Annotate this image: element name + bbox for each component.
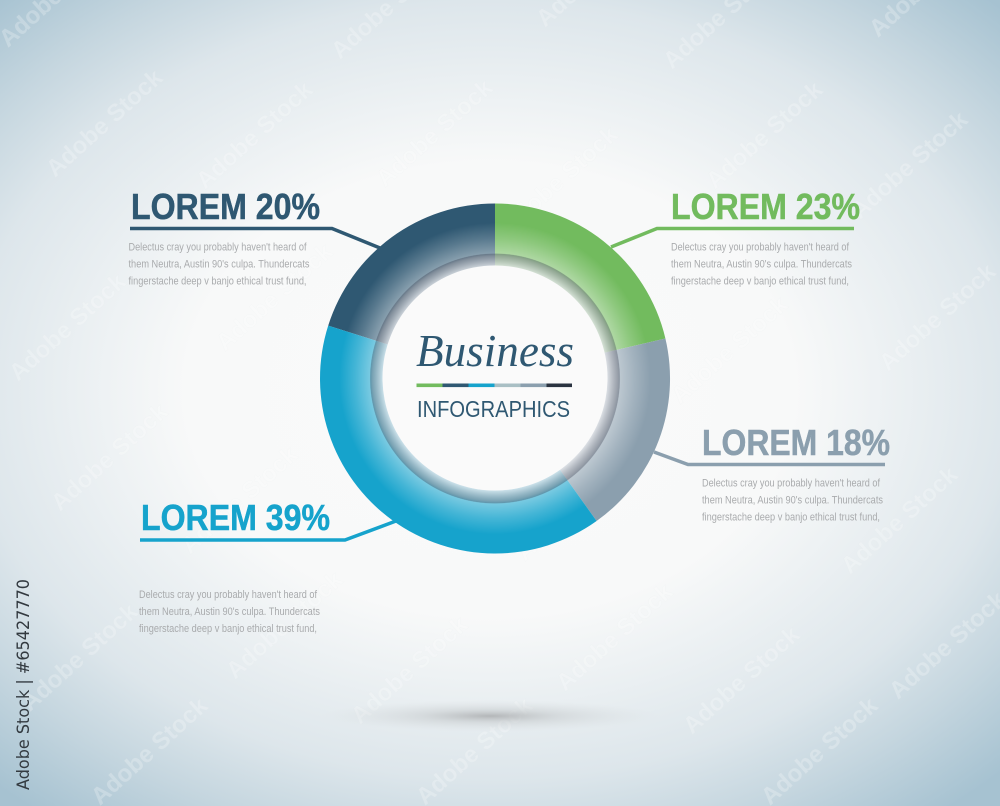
watermark pattern: Adobe Stock — [666, 291, 794, 409]
watermark pattern: Adobe Stock — [176, 441, 304, 559]
donut chart — [320, 204, 670, 554]
watermark pattern: Adobe Stock — [46, 398, 174, 516]
body text — [139, 589, 320, 635]
body text: fingerstache deep v banjo ethical trust fund, — [671, 276, 849, 288]
heading: LOREM 23% — [671, 186, 860, 227]
watermark pattern: Adobe Stock — [496, 121, 624, 239]
watermark pattern: Adobe Stock — [221, 566, 349, 684]
colour bar — [416, 384, 572, 387]
body text: Delectus cray you probably haven't heard of — [128, 242, 307, 254]
watermark pattern: Adobe Stock — [191, 76, 319, 194]
watermark pattern: Adobe Stock — [874, 258, 1000, 376]
body text — [671, 242, 852, 288]
body text: them Neutra, Austin 90's culpa. Thundercats — [139, 606, 320, 618]
watermark pattern: Adobe Stock — [846, 106, 974, 224]
body text: them Neutra, Austin 90's culpa. Thundercats — [702, 494, 883, 506]
segment: dark blue 20% — [328, 204, 495, 345]
callout: Lorem 23% — [611, 186, 860, 288]
watermark pattern: Adobe Stock — [346, 611, 474, 729]
leader line — [654, 452, 885, 464]
heading: LOREM 20% — [131, 186, 320, 227]
body text — [128, 242, 310, 288]
inner ring shading — [320, 204, 670, 554]
segment: grey 18% — [560, 338, 670, 521]
floor shadow — [320, 700, 660, 732]
body text: them Neutra, Austin 90's culpa. Thundercats — [128, 258, 310, 270]
segment: green 23% — [495, 204, 665, 353]
watermark pattern: Adobe Stock — [41, 64, 169, 182]
watermark pattern: Adobe Stock — [4, 268, 132, 386]
body text: Delectus cray you probably haven't heard of — [671, 242, 850, 254]
watermark pattern: Adobe Stock — [16, 598, 144, 716]
body text: fingerstache deep v banjo ethical trust fund, — [702, 512, 880, 524]
watermark pattern: Adobe Stock — [701, 76, 829, 194]
watermark pattern: Adobe Stock — [211, 238, 339, 356]
center disc — [382, 266, 608, 490]
heading: LOREM 18% — [702, 422, 890, 463]
body text — [702, 478, 883, 524]
callout: Lorem 39% — [139, 497, 396, 635]
heading: LOREM 39% — [141, 497, 330, 538]
watermark pattern: Adobe Stock — [836, 461, 964, 579]
body text: Delectus cray you probably haven't heard of — [139, 589, 318, 601]
leader line — [611, 228, 854, 247]
watermark pattern: Adobe Stock — [371, 408, 499, 526]
callout: Lorem 18% — [654, 422, 890, 524]
script word: Business: Business — [416, 325, 574, 376]
subtitle: INFOGRAPHICS: INFOGRAPHICS — [417, 396, 570, 422]
watermark pattern: Adobe Stock — [551, 578, 679, 696]
body text: fingerstache deep v banjo ethical trust fund, — [139, 623, 317, 635]
watermark pattern: Adobe Stock — [371, 74, 499, 192]
stock id label: Adobe Stock | #65427770 — [14, 579, 34, 790]
callout: Lorem 20% — [128, 186, 380, 288]
body text: Delectus cray you probably haven't heard of — [702, 478, 881, 490]
body text: fingerstache deep v banjo ethical trust fund, — [128, 276, 306, 288]
center title — [416, 325, 574, 422]
leader line — [130, 228, 380, 248]
segment: blue 39% — [320, 326, 597, 554]
watermark pattern: Adobe Stock — [511, 448, 639, 566]
watermark pattern: Adobe Stock — [678, 621, 806, 739]
leader line — [140, 521, 396, 540]
body text: them Neutra, Austin 90's culpa. Thundercats — [671, 258, 852, 270]
